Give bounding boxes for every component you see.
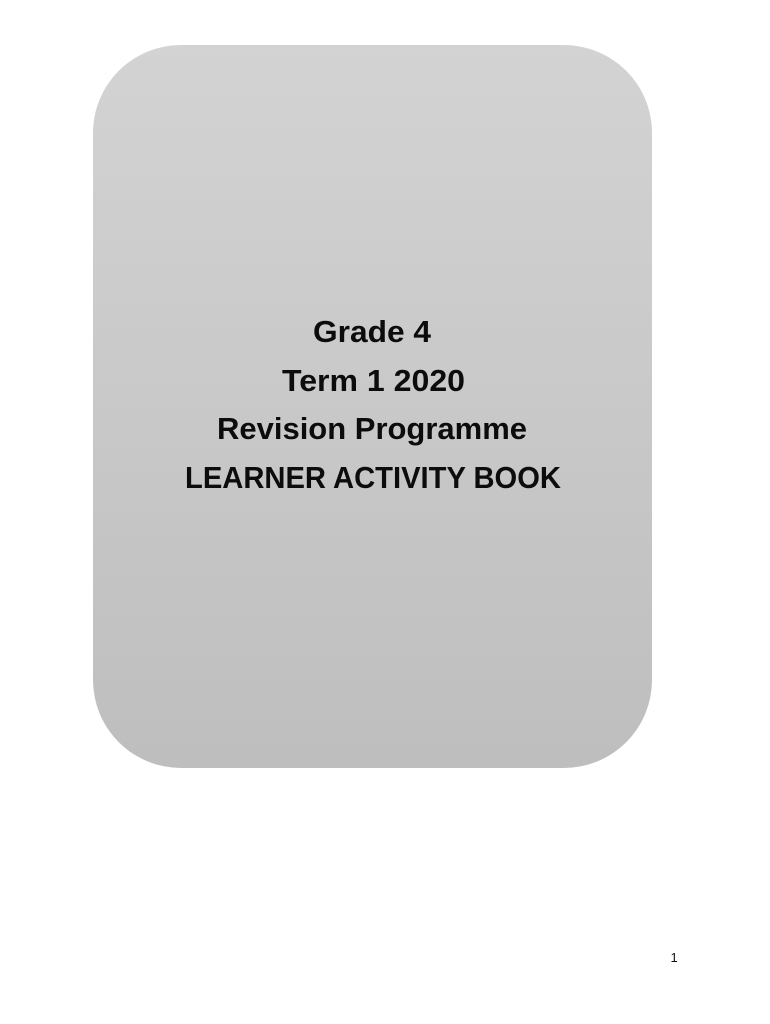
heading: term: Term 1 2020 [282, 364, 465, 398]
heading: grade: Grade 4 [313, 315, 431, 349]
heading: learner activity book: LEARNER ACTIVITY BOOK [185, 461, 561, 495]
heading: programme: Revision Programme [217, 412, 527, 446]
page number: 1 [670, 950, 678, 965]
panel: rounded grey cover [93, 45, 652, 768]
title block [185, 315, 561, 495]
